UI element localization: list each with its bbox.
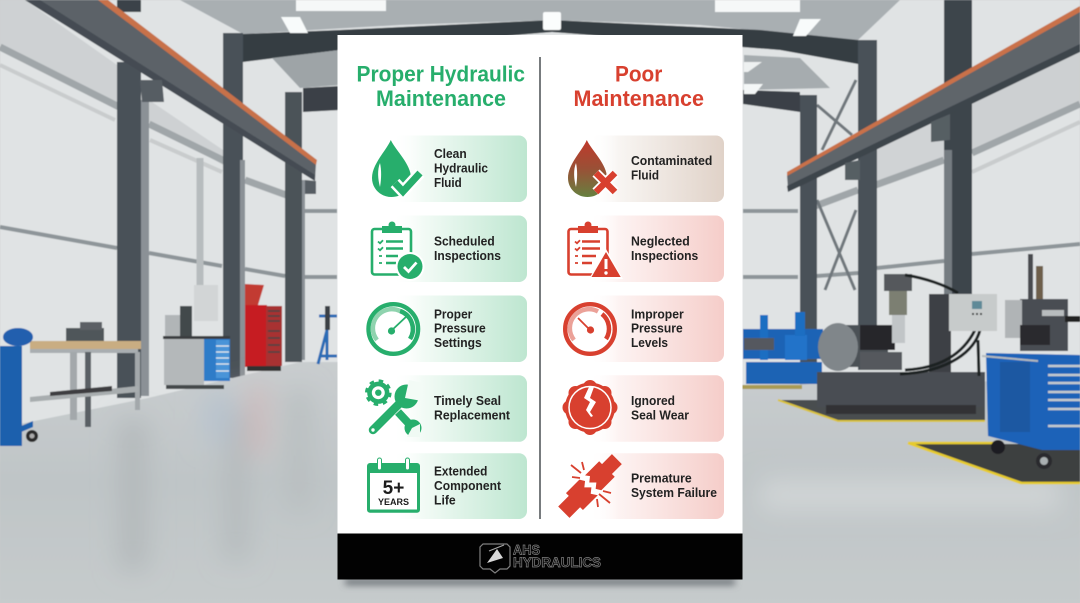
panel: proper maintenance	[356, 62, 527, 519]
blue machine stand at far left	[0, 328, 38, 446]
text: proper pressure settings	[434, 306, 486, 350]
text: ignored seal wear	[631, 393, 689, 423]
logo: AHS Hydraulics: HYDRAULICS	[513, 555, 601, 570]
text: clean hydraulic fluid: Hydraulic	[434, 160, 488, 176]
poster panel	[338, 35, 742, 534]
icon: cracked seal	[562, 380, 618, 435]
row: proper pressure settings	[368, 296, 527, 362]
icon: pressure gauge	[368, 304, 418, 354]
text: clean hydraulic fluid	[434, 146, 488, 190]
text: extended component life: Extended	[434, 464, 487, 479]
text: timely seal replacement: Replacement	[434, 408, 511, 423]
heading: proper hydraulic maintenance: Proper Hydraulic	[356, 62, 525, 86]
floor mats and yellow safety lines	[778, 400, 1080, 483]
row: neglected inspections	[568, 216, 724, 282]
heading: poor maintenance: Poor	[615, 62, 663, 86]
steel columns	[117, 0, 972, 398]
row: timely seal replacement	[366, 375, 527, 442]
text: improper pressure levels: Improper	[631, 306, 684, 321]
text: premature system failure: Premature	[631, 471, 692, 486]
icon: calendar 5+ years: 5+	[383, 478, 404, 499]
text: scheduled inspections: Inspections	[434, 248, 501, 263]
logo: AHS Hydraulics: AHS	[513, 542, 540, 558]
right overhead beam	[787, 6, 1080, 192]
row: premature system failure	[555, 451, 724, 521]
blue pump unit	[742, 312, 823, 389]
icon: clipboard with check	[372, 222, 424, 281]
text: clean hydraulic fluid: Clean	[434, 146, 467, 161]
text: contaminated fluid: Contaminated	[631, 153, 712, 168]
text: extended component life: Component	[434, 478, 502, 493]
blue engine stand	[318, 306, 337, 364]
wall rails	[0, 47, 1080, 290]
text: clean hydraulic fluid: Fluid	[434, 175, 462, 190]
floor reflections	[120, 385, 1060, 570]
text: scheduled inspections: Scheduled	[434, 234, 495, 249]
panel: poor maintenance	[555, 62, 724, 521]
concrete floor	[0, 362, 1080, 603]
test rig on cart	[1005, 254, 1080, 351]
row: scheduled inspections	[372, 216, 527, 282]
row: extended component life	[367, 453, 527, 519]
poster shadow	[345, 579, 735, 585]
text: ignored seal wear: Seal Wear	[631, 408, 689, 423]
row: improper pressure levels	[565, 296, 724, 362]
heading: proper hydraulic maintenance	[356, 62, 525, 111]
red tool chest	[245, 284, 282, 371]
heading: poor maintenance: Maintenance	[574, 86, 704, 111]
text: timely seal replacement	[434, 393, 511, 423]
grey tool cabinet	[163, 285, 230, 389]
text: extended component life: Life	[434, 492, 456, 507]
text: timely seal replacement: Timely Seal	[434, 393, 501, 408]
row: contaminated fluid	[568, 136, 724, 202]
icon: clipboard with warning	[568, 222, 623, 279]
heading: poor maintenance	[574, 62, 704, 111]
text: contaminated fluid: Fluid	[631, 167, 659, 182]
icon: overloaded pressure gauge	[565, 304, 615, 354]
text: proper pressure settings: Settings	[434, 335, 482, 350]
icon: clean drop with check	[372, 140, 420, 197]
ceiling	[180, 0, 900, 112]
row: ignored seal wear	[562, 375, 724, 442]
icon: broken pipe	[555, 451, 625, 521]
text: neglected inspections	[631, 234, 698, 263]
text: improper pressure levels: Levels	[631, 335, 668, 350]
heading: proper hydraulic maintenance: Maintenance	[376, 86, 506, 111]
logo: AHS Hydraulics	[480, 542, 601, 573]
hydraulic power unit	[817, 274, 997, 414]
text: neglected inspections: Inspections	[631, 248, 698, 263]
footer bar	[338, 534, 742, 580]
text: scheduled inspections	[434, 234, 501, 263]
row: clean hydraulic fluid	[372, 136, 527, 202]
icon: calendar 5+ years	[367, 458, 420, 513]
text: premature system failure: System Failure	[631, 485, 717, 500]
left workbench with vise	[30, 322, 141, 427]
text: neglected inspections: Neglected	[631, 234, 690, 249]
icon: calendar 5+ years: YEARS	[378, 497, 409, 507]
text: contaminated fluid	[631, 153, 712, 182]
text: proper pressure settings: Proper	[434, 306, 472, 321]
text: improper pressure levels	[631, 306, 684, 350]
text: improper pressure levels: Pressure	[631, 321, 683, 336]
text: proper pressure settings: Pressure	[434, 321, 486, 336]
blue tool cart	[982, 353, 1080, 469]
icon: contaminated drop with x	[568, 140, 615, 197]
text: premature system failure	[631, 471, 717, 500]
text: ignored seal wear: Ignored	[631, 393, 675, 408]
icon: gear and wrenches	[366, 380, 423, 437]
left overhead beam	[25, 0, 317, 194]
text: extended component life	[434, 464, 502, 507]
